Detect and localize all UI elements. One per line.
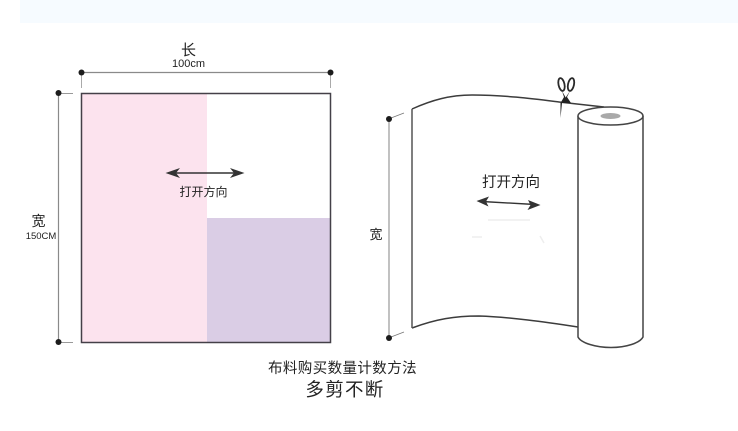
length value: 100cm [172,58,205,70]
opening direction label: 打开方向 [179,184,228,199]
caption: cut in one continuous piece: 多剪不断 [305,379,385,400]
pink fabric area [82,94,207,342]
caption: fabric purchase counting method: 布料购买数量计数方法 [268,360,417,377]
roll core hole [600,113,620,119]
width label: 宽 [369,227,383,242]
faint marks on the fabric sheet [472,220,544,243]
roll cylinder [578,107,643,348]
length dimension line [78,70,334,88]
width dimension line [56,90,73,345]
width label: 宽 [32,213,46,229]
width dimension line [386,113,404,341]
width value: 150CM [26,231,56,242]
fabric outline [82,94,330,342]
panel: flat fabric diagram [26,42,334,345]
length label: 长 [181,42,196,59]
lavender fabric area [207,218,331,342]
icon: scissors [557,78,575,118]
sheet left edge [411,109,413,328]
opening direction label: 打开方向 [482,174,540,191]
panel: fabric roll diagram [369,78,643,347]
arrow: opening direction [166,168,244,178]
arrow: opening direction [476,196,540,210]
unrolled fabric sheet [412,95,604,328]
top banner band [20,0,738,23]
